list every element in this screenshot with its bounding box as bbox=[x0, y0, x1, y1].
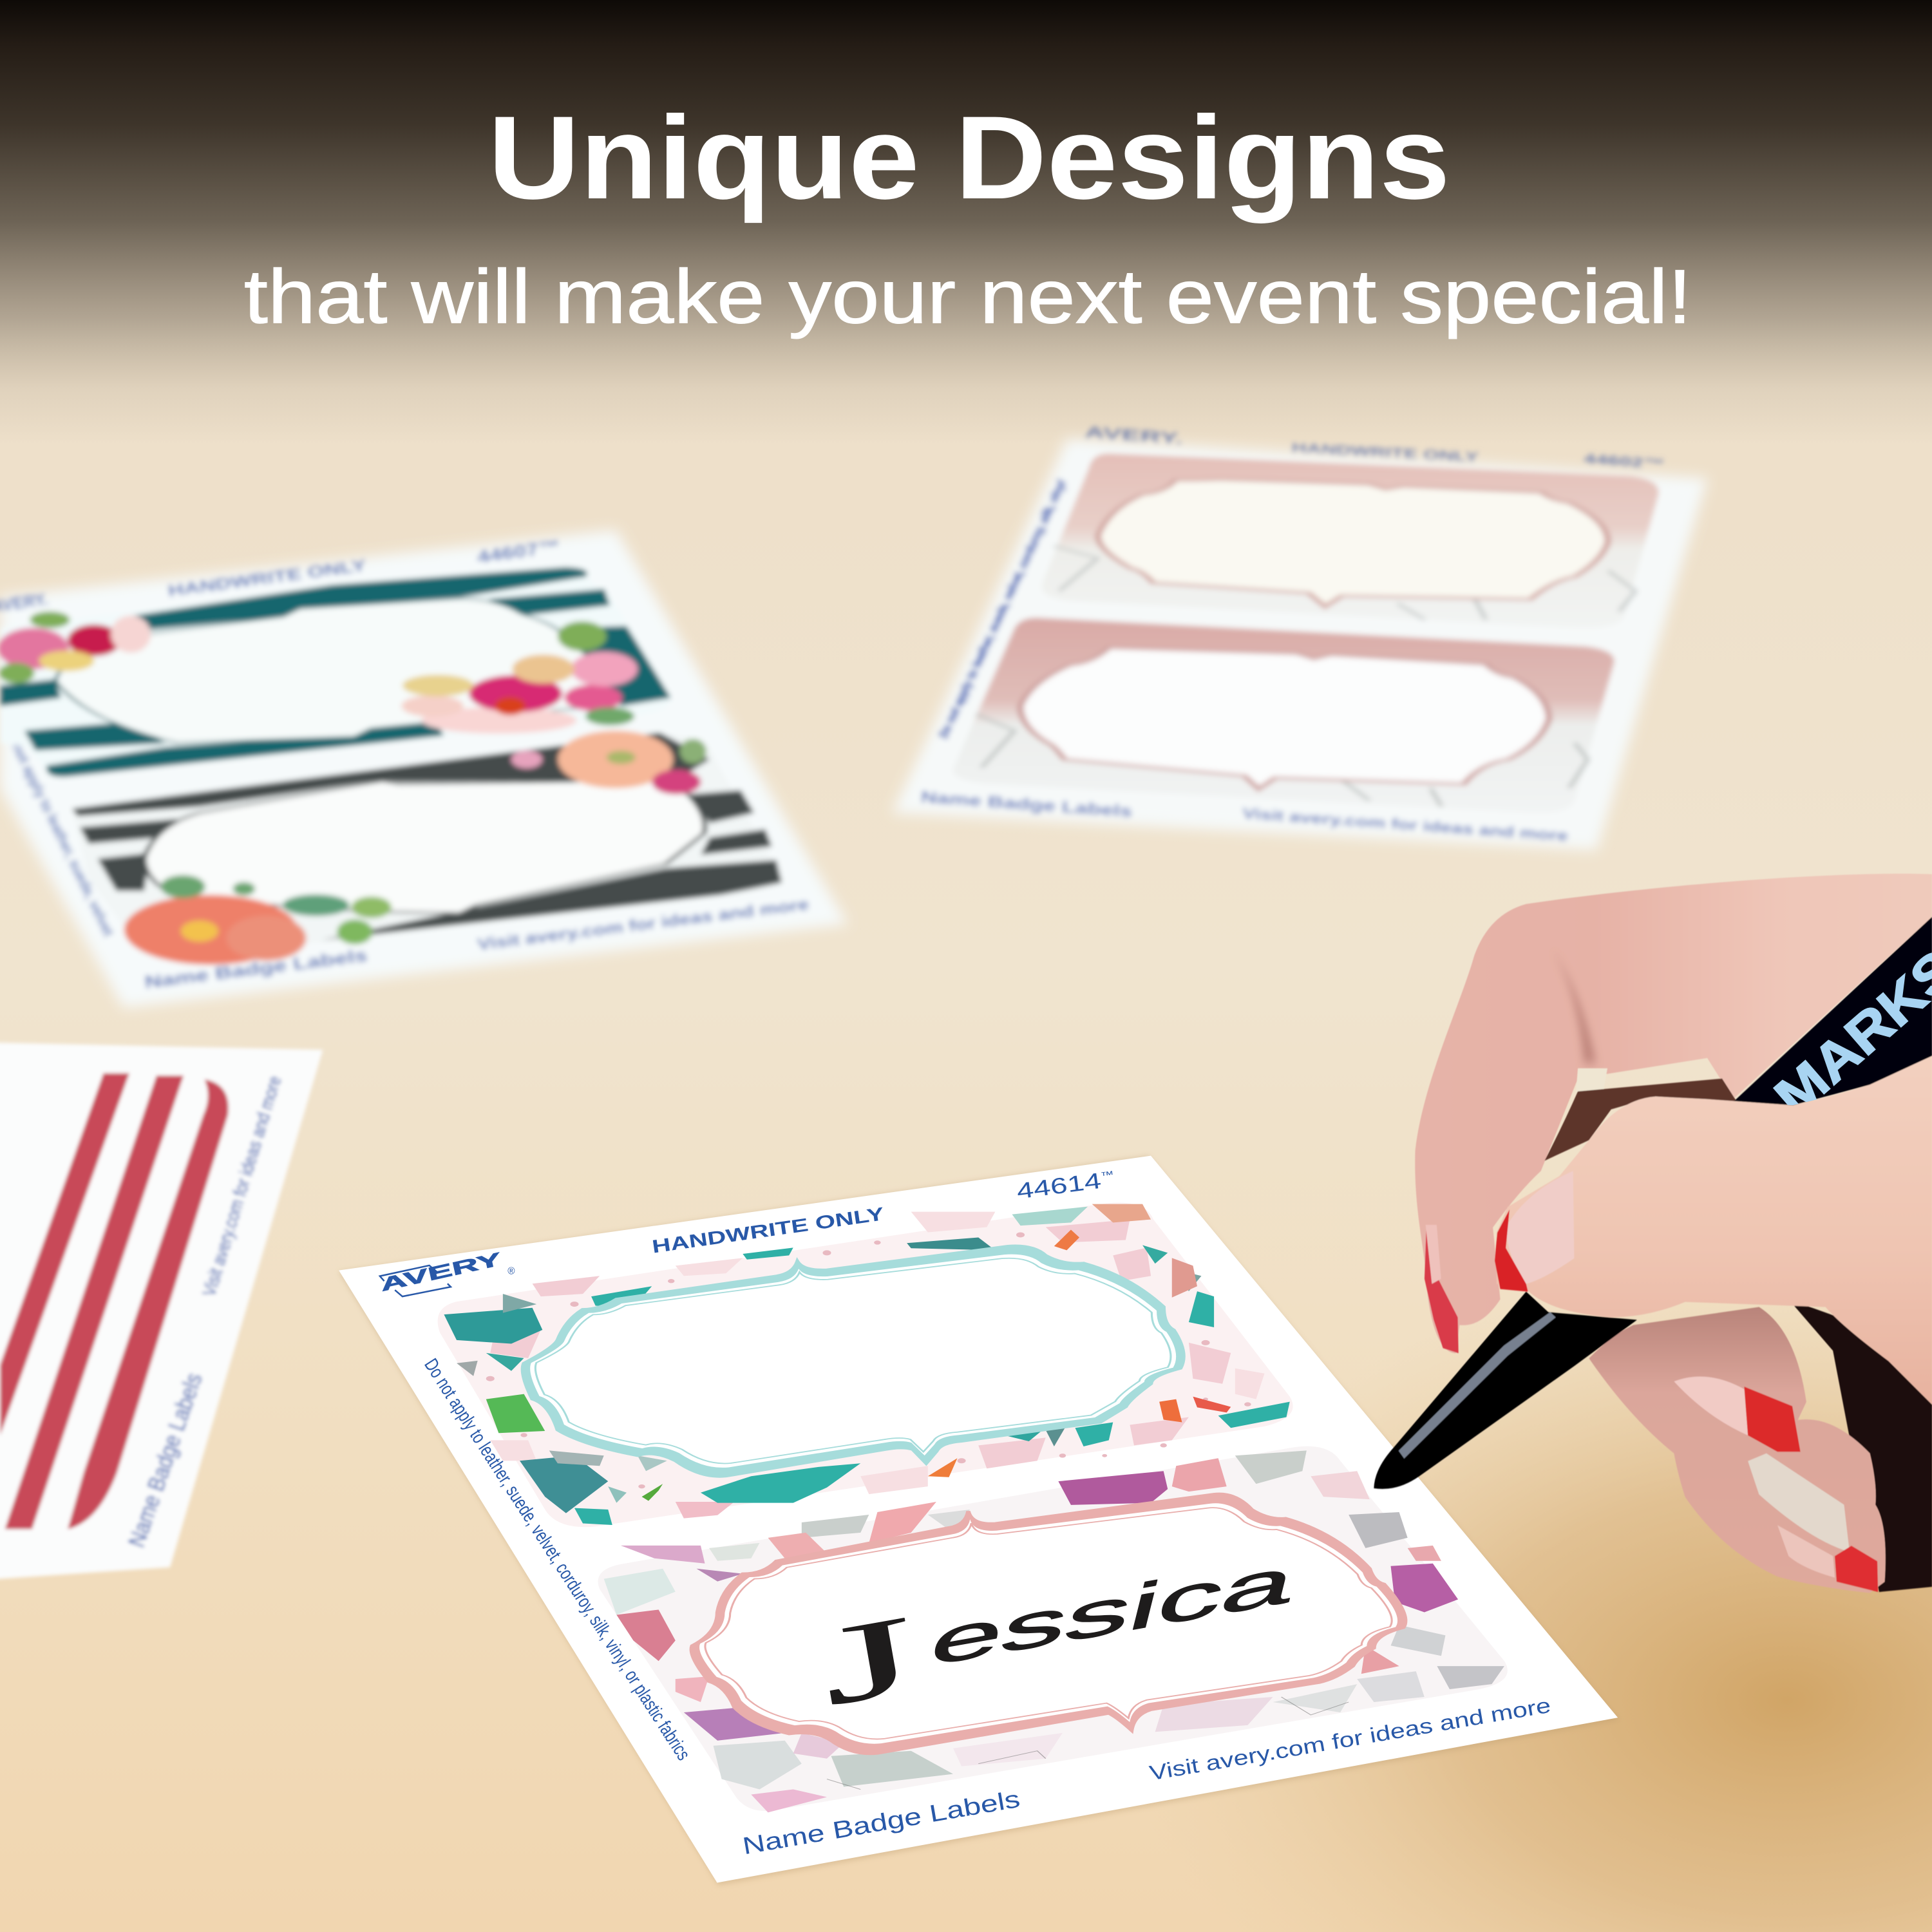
upper fingernail bbox=[1425, 1227, 1459, 1353]
sheet wording: marble bbox=[920, 423, 1665, 844]
pink terrazzo label bbox=[598, 1446, 1508, 1812]
sheet wording: red stripe bbox=[123, 1074, 286, 1551]
sheet wording: marble: Name Badge Labels bbox=[920, 788, 1133, 820]
lower marble label bbox=[953, 618, 1615, 813]
sheet wording: floral: Visit avery.com for ideas and more bbox=[477, 895, 810, 954]
upper marble label bbox=[1042, 453, 1659, 629]
sheet wording: floral: 44607™ bbox=[476, 536, 562, 567]
blurred sheet: rose glitter and marble name badges bbox=[892, 423, 1708, 850]
dark stripe label bbox=[72, 733, 782, 954]
product name: Name Badge Labels bbox=[741, 1785, 1022, 1859]
handwritten name bbox=[811, 1543, 1303, 1729]
floral accents bbox=[0, 612, 706, 965]
sheet wording: floral: HANDWRITE ONLY bbox=[167, 556, 368, 600]
AVERY logo: ® bbox=[507, 1265, 515, 1276]
product number: 44614 bbox=[1015, 1171, 1079, 1204]
dark gap between fingers bbox=[1544, 1079, 1737, 1160]
heading on sheet: HANDWRITE ONLY bbox=[650, 1204, 886, 1258]
handwritten name: J bbox=[811, 1591, 925, 1729]
dark palm shadow bbox=[1788, 1300, 1932, 1592]
hand holding marker bbox=[1374, 874, 1932, 1593]
subtitle: that will make your next event special! bbox=[244, 254, 1692, 339]
sheet wording: marble: HANDWRITE ONLY bbox=[1291, 440, 1479, 465]
sheet wording: floral: Do not apply to leather, suede, velvet bbox=[0, 721, 117, 939]
sheet wording: marble: AVERY. bbox=[1084, 423, 1184, 448]
main sheet: terrazzo name badges bbox=[339, 1156, 1619, 1885]
glitter fingernail bbox=[1748, 1454, 1878, 1592]
product number: ™ bbox=[1100, 1169, 1115, 1182]
sheet wording: marble: Visit avery.com for ideas and more bbox=[1242, 804, 1569, 844]
lower fingers bbox=[1589, 1307, 1886, 1593]
dark top gradient bbox=[0, 0, 1932, 444]
AVERY logo: AVERY bbox=[379, 1249, 503, 1296]
teal terrazzo label bbox=[438, 1203, 1293, 1527]
thumb bbox=[1497, 1056, 1932, 1405]
sheet wording: marble: 44602™ bbox=[1583, 451, 1665, 472]
marker barrel lower bbox=[1374, 1292, 1637, 1489]
blurred sheet: floral and stripe name badges bbox=[0, 530, 848, 1008]
website text: Visit avery.com for ideas and more bbox=[1148, 1694, 1553, 1785]
thumbnail bbox=[1495, 1171, 1574, 1292]
middle fingernail bbox=[1674, 1376, 1801, 1452]
marker barrel upper bbox=[1734, 917, 1932, 1105]
sheet wording: floral: Name Badge Labels bbox=[144, 945, 368, 992]
warning side text: Do not apply to leather, suede, velvet, corduroy, silk, vinyl, or plastic fabrics bbox=[420, 1355, 694, 1764]
handwritten name: essica bbox=[923, 1543, 1303, 1680]
sheet wording: red stripe: Name Badge Labels bbox=[123, 1369, 207, 1551]
sheet wording: floral bbox=[0, 536, 810, 992]
AVERY logo bbox=[379, 1249, 515, 1296]
red stripes bbox=[0, 1073, 229, 1529]
title: Unique Designs bbox=[488, 91, 1450, 223]
sheet wording: red stripe: Visit avery.com for ideas and more bbox=[199, 1074, 286, 1299]
index finger bbox=[1415, 874, 1932, 1353]
sheet wording: marble: Do not apply to leather, suede, velvet, corduroy, silk, vinyl bbox=[937, 478, 1069, 741]
teal stripe label bbox=[0, 567, 671, 777]
blurred sheet: red stripe name badge bbox=[0, 1043, 323, 1580]
